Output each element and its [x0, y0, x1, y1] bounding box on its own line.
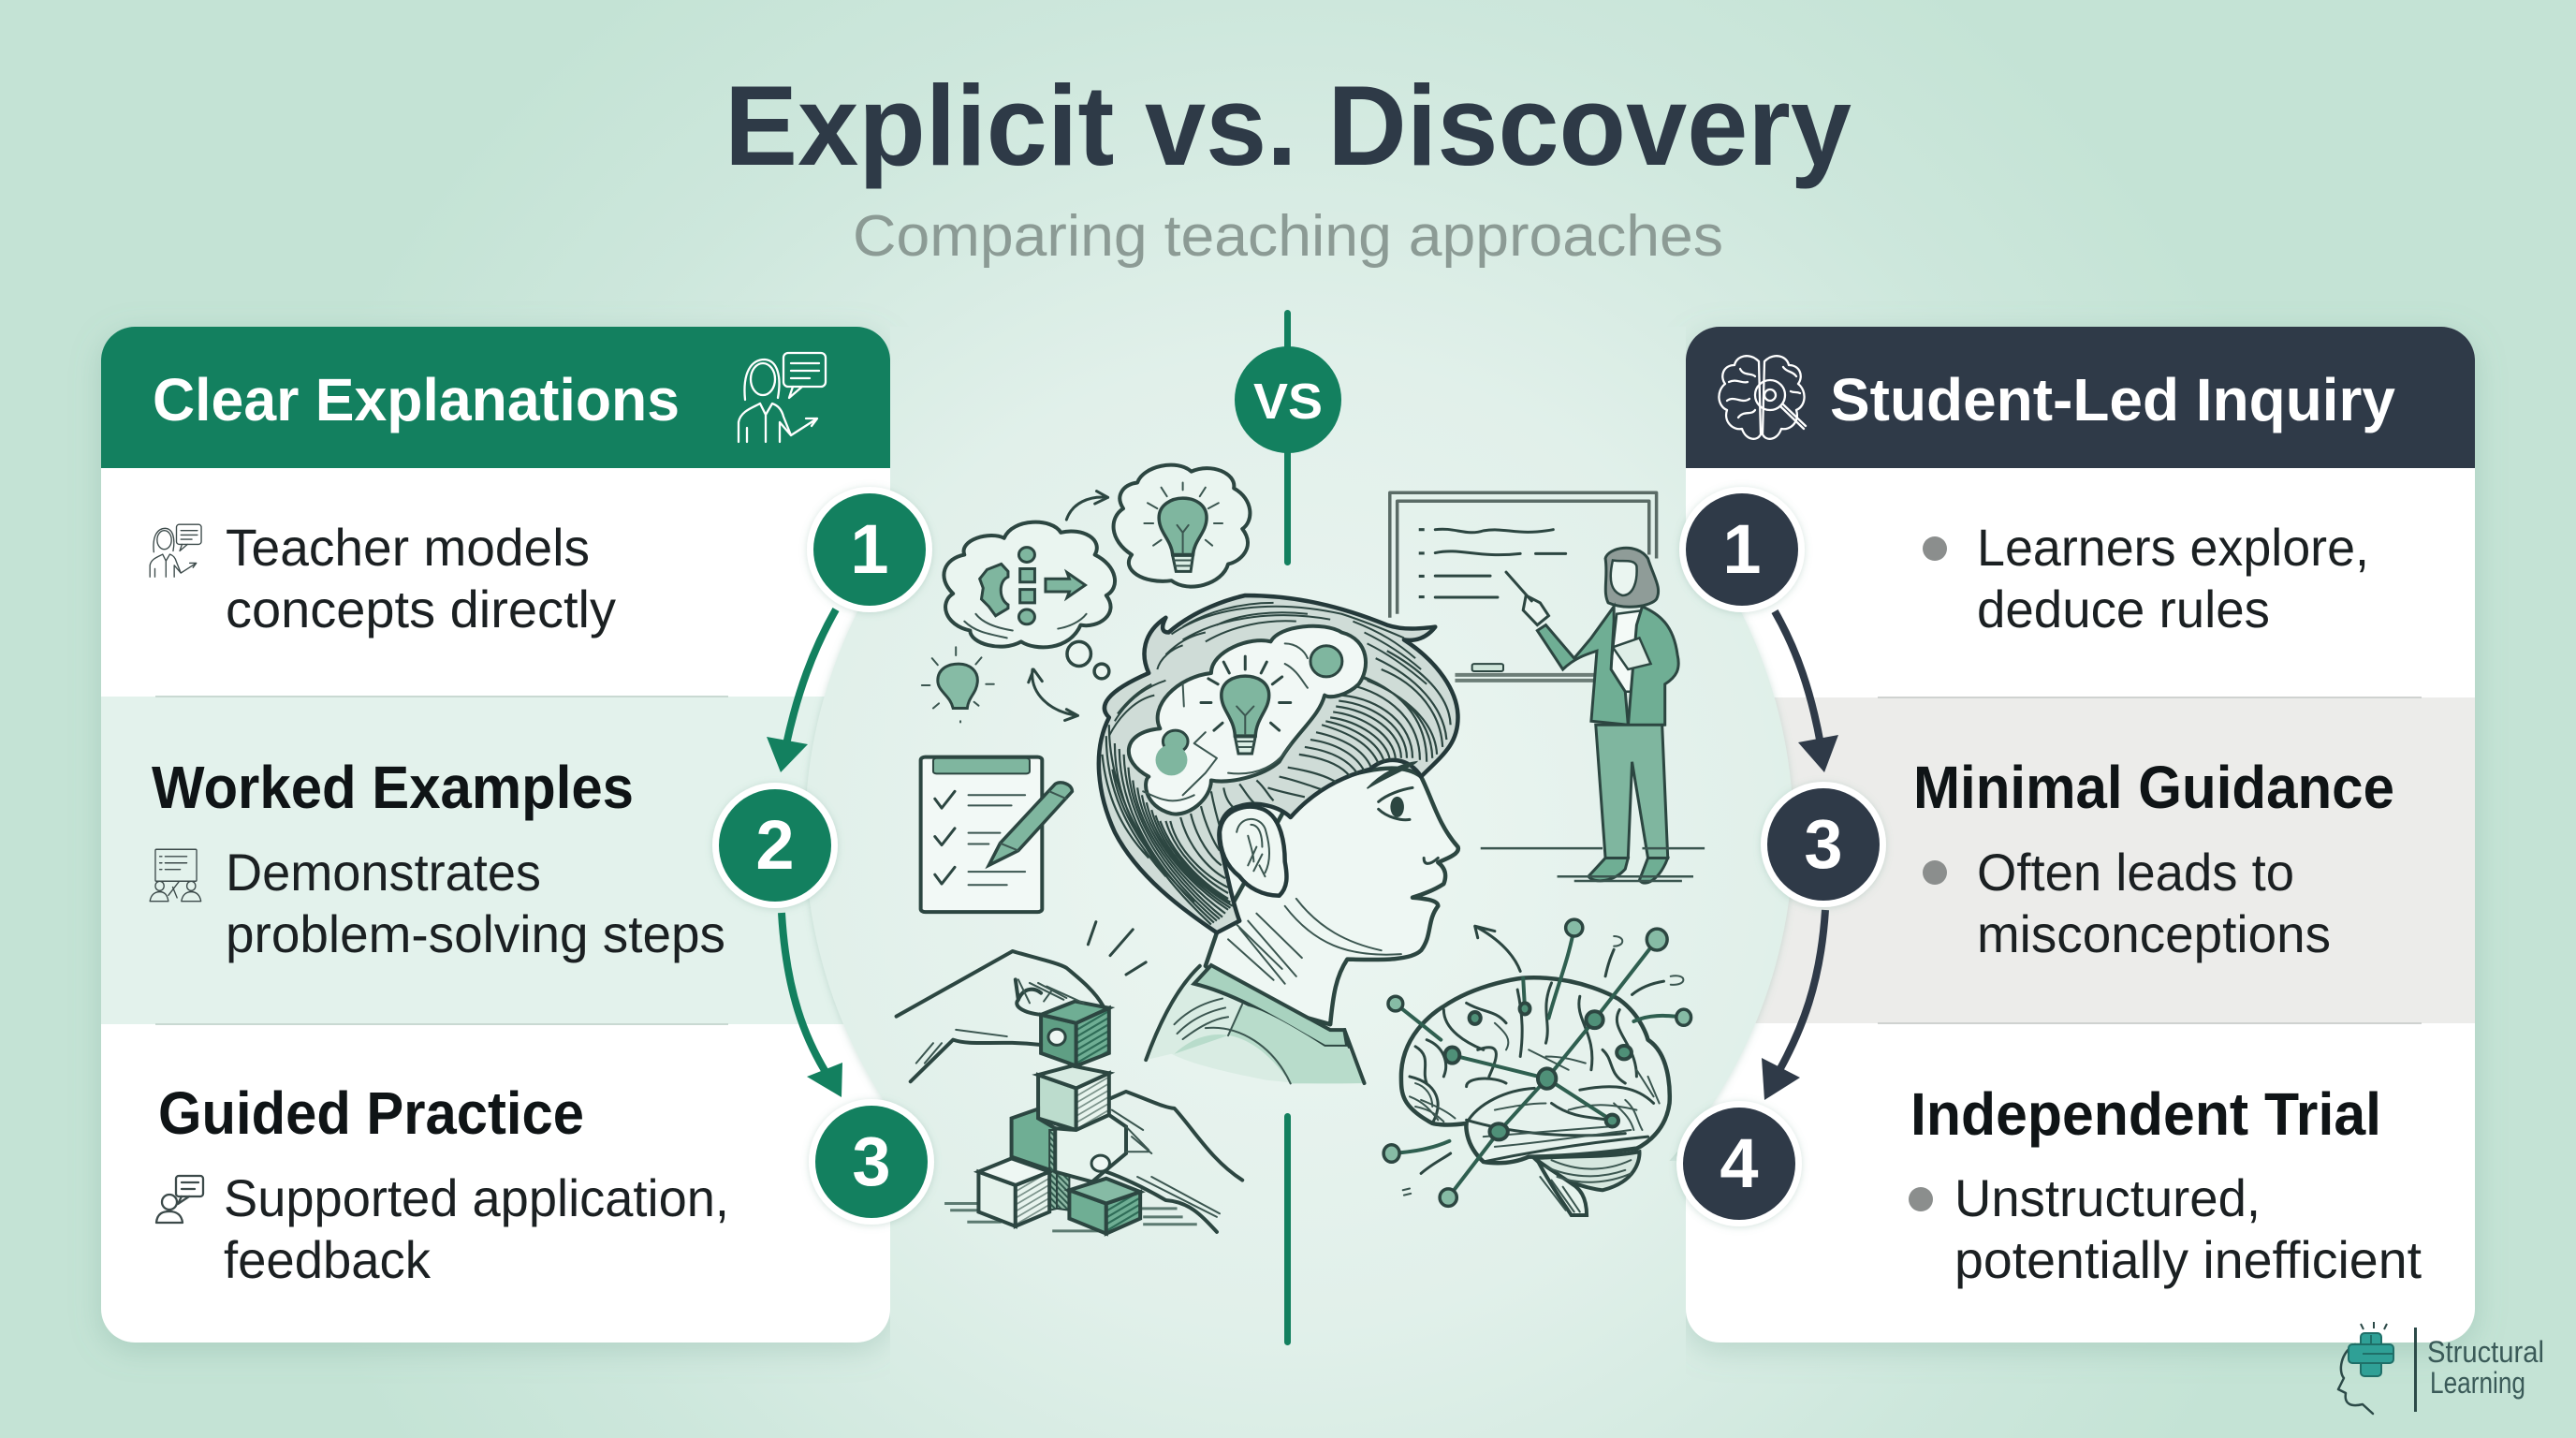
badge: left 1 — [807, 487, 932, 612]
whiteboard — [1390, 492, 1657, 681]
text: deduce rules: deduce rules — [1977, 580, 2270, 638]
heading: clear explanations: Clear Explanations — [153, 366, 680, 433]
child: hair — [1099, 595, 1458, 932]
text: potentially inefficient: potentially inefficient — [1954, 1230, 2422, 1289]
panel: clear explanations — [101, 327, 890, 1343]
arrow: left 2 to 3 — [782, 913, 842, 1097]
clipboard with checklist — [921, 757, 1072, 912]
logo text: Structural — [2427, 1335, 2544, 1369]
text: supported application: Supported application, — [224, 1168, 729, 1227]
badge: right 4 — [1676, 1101, 1802, 1226]
heading: student-led inquiry: Student-Led Inquiry — [1830, 366, 2395, 433]
thought bubbles — [1067, 641, 1109, 679]
badge: left 2: 2 — [755, 806, 795, 884]
subtitle: Comparing teaching approaches — [853, 204, 1723, 269]
bullet — [1923, 536, 1947, 561]
panel header — [101, 327, 890, 468]
badge: right 3 — [1761, 782, 1886, 907]
building blocks with hands — [897, 922, 1242, 1234]
title: Explicit vs. Discovery — [724, 62, 1852, 189]
logo: structural learning — [2338, 1322, 2544, 1414]
badge: left 3 — [809, 1099, 934, 1225]
icon: small bulb — [922, 647, 994, 722]
panel: student-led inquiry — [1686, 327, 2475, 1343]
right panel texts — [1719, 356, 2422, 1289]
arrow: left 1 to 2 — [767, 609, 836, 772]
central circle backdrop — [805, 339, 1793, 1328]
brain with network nodes — [1383, 919, 1691, 1215]
illustration: lower centre (blocks and brain) — [897, 919, 1691, 1234]
text: teacher models: Teacher models — [226, 518, 590, 577]
teacher figure — [1481, 548, 1705, 883]
text: learners explore: Learners explore, — [1977, 518, 2369, 577]
mask of header overflow — [890, 327, 1686, 524]
left panel texts — [150, 353, 826, 1289]
logo: structural learning: Learning — [2430, 1366, 2525, 1400]
row tint — [101, 697, 890, 1024]
text: misconceptions: misconceptions — [1977, 904, 2331, 963]
illustration: upper centre (thought clouds, head, teacher) — [921, 465, 1705, 1084]
badge: left 3: 3 — [852, 1123, 891, 1200]
icon: teacher (row) — [150, 524, 201, 577]
child: eye and brow — [1228, 762, 1443, 984]
vs divider — [1235, 310, 1341, 1345]
thought cloud: bulb — [1114, 465, 1250, 587]
panel header — [1686, 327, 2475, 468]
bullet — [1909, 1187, 1933, 1211]
icon: guided practice — [156, 1176, 203, 1223]
logo icon — [2338, 1322, 2393, 1414]
vs label: VS — [1253, 374, 1323, 430]
text: demonstrates: Demonstrates — [226, 843, 541, 902]
badge: right 4: 4 — [1720, 1124, 1759, 1202]
badge: right 1: 1 — [1722, 510, 1762, 588]
bullet — [1923, 860, 1947, 885]
text: feedback: feedback — [224, 1230, 432, 1289]
child: face — [1206, 769, 1458, 1024]
heading: worked examples: Worked Examples — [152, 754, 634, 821]
heading: independent trial: Independent Trial — [1910, 1080, 2381, 1148]
text: concepts directly: concepts directly — [226, 580, 616, 638]
child: brain thought inside head — [1129, 626, 1366, 814]
badge: left 2 — [712, 783, 838, 908]
child: shirt — [1146, 965, 1365, 1084]
text: often leads to: Often leads to — [1977, 843, 2294, 902]
heading: guided practice: Guided Practice — [158, 1079, 584, 1147]
icon: brain with magnifier — [1719, 356, 1806, 439]
arrow: right 1 to 3 — [1775, 611, 1838, 772]
arrow: right 3 to 4 — [1762, 910, 1825, 1100]
badge: right 1 — [1679, 487, 1805, 612]
icon: worked examples — [150, 849, 201, 902]
child: ear — [1220, 807, 1286, 896]
badge: left 1: 1 — [850, 510, 889, 588]
row tint — [1686, 697, 2475, 1023]
badge: right 3: 3 — [1804, 805, 1843, 883]
heading: minimal guidance: Minimal Guidance — [1913, 754, 2394, 821]
arrows between clouds — [1029, 492, 1108, 721]
text: unstructured: Unstructured, — [1954, 1168, 2261, 1227]
text: problem-solving steps: problem-solving steps — [226, 904, 725, 963]
thought cloud: process — [944, 522, 1115, 647]
icon: teacher (header) — [739, 353, 826, 442]
